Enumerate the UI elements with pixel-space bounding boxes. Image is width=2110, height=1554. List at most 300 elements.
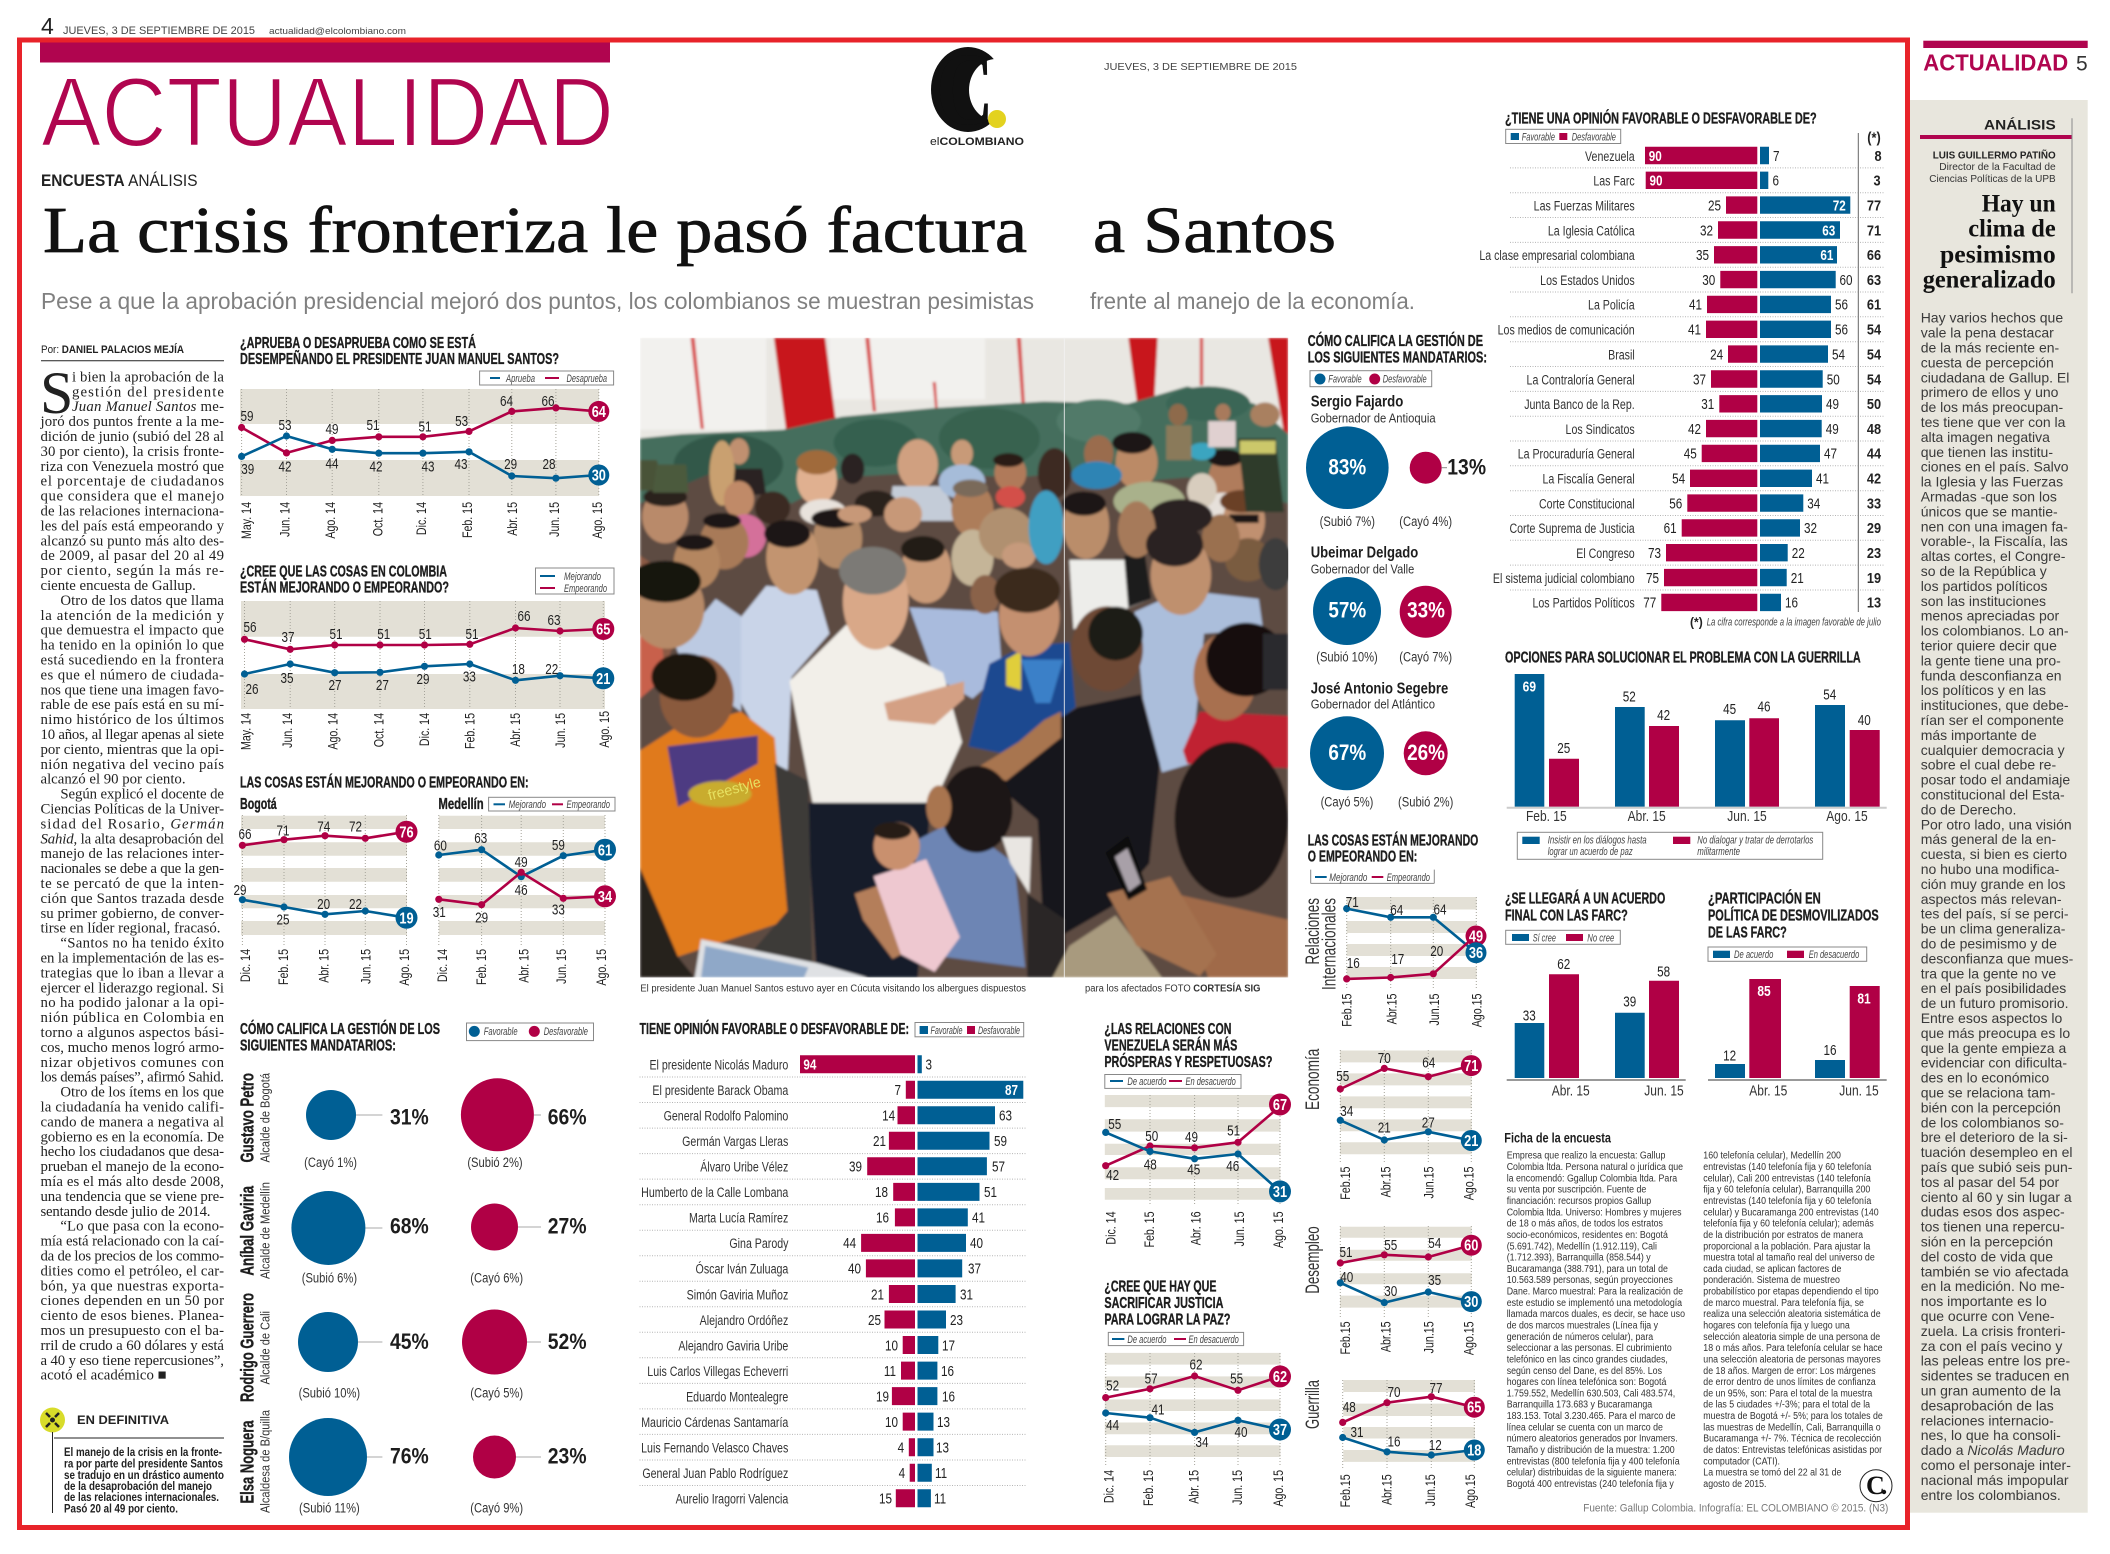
value labels: 16 xyxy=(941,1363,954,1379)
chart title: ¿PARTICIPACIÓN EN xyxy=(1708,888,1821,907)
x axis: Oct. 14 xyxy=(371,713,387,747)
man in blue vest xyxy=(968,642,1076,755)
value labels: 56 xyxy=(243,619,257,635)
chart: Bogotá: 71 xyxy=(276,822,290,839)
column chart: participación en política xyxy=(1708,888,1887,1099)
bar chart: personajes xyxy=(640,1019,1026,1507)
row names: El presidente Nicolás Maduro xyxy=(649,1057,788,1073)
value labels: 42 xyxy=(1106,1167,1119,1183)
July favourable column: 42 xyxy=(1867,470,1881,487)
sheet column 1: número aleatorios generados por Invamers. xyxy=(1507,1433,1678,1445)
legend xyxy=(1708,947,1867,961)
value labels: 30 xyxy=(1702,272,1715,288)
sidebar body text: los políticos y en las xyxy=(1921,682,2046,698)
value labels: 41 xyxy=(1688,321,1701,338)
icon: small logo seal: C xyxy=(1866,1471,1885,1500)
value labels: 66 xyxy=(517,608,531,624)
Sergio Fajardo: Gobernador de Antioquia xyxy=(1311,411,1436,426)
chart: relaciones internacionales: Feb.15 xyxy=(1339,994,1355,1027)
article body text: una tendencia que se viene pre- xyxy=(40,1189,224,1205)
chart: relaciones internacionales: Ago.15 xyxy=(1469,994,1485,1027)
value labels: 25 xyxy=(868,1311,881,1328)
legend: De acuerdo xyxy=(1127,1334,1166,1346)
sidebar body text: aspectos más relevan- xyxy=(1921,891,2062,907)
legend: Mejorando xyxy=(509,799,546,811)
chart title xyxy=(240,1019,440,1054)
article body text: te se percató de que la inten- xyxy=(40,876,224,892)
footnote: La cifra corresponde a la imagen favorable de julio xyxy=(1707,617,1881,629)
source line: Fuente: Gallup Colombia. Infografía: EL COLOMBIANO © 2015. (N3) xyxy=(1583,1503,1888,1515)
value labels: 44 xyxy=(843,1235,857,1252)
value labels: 49 xyxy=(325,421,339,437)
sheet column 2: de datos: Entrevistas telefónicas asistidas por xyxy=(1703,1444,1883,1456)
sidebar body text: la Iglesia y las Fuerzas xyxy=(1921,474,2063,490)
value labels: 24 xyxy=(1710,346,1724,363)
sidebar body text: en la medición. No me- xyxy=(1921,1278,2065,1294)
chart: Bogotá: Ago. 15 xyxy=(397,949,412,986)
July favourable column: 50 xyxy=(1867,395,1881,412)
x axis: Ago. 15 xyxy=(590,502,605,539)
row: Gustavo Petro: Gustavo Petro xyxy=(238,1073,258,1162)
chart title: ¿APRUEBA O DESAPRUEBA COMO SE ESTÁ xyxy=(240,333,476,352)
legend: Desfavorable xyxy=(1572,132,1616,144)
row names: Los Sindicatos xyxy=(1566,422,1635,437)
sidebar body text: Hay varios hechos que xyxy=(1921,310,2063,326)
value labels: 55 xyxy=(1108,1116,1121,1132)
chart: Medellín: 29 xyxy=(475,909,488,926)
chart: guerrilla: Feb.15 xyxy=(1338,1474,1353,1507)
chart title: LAS COSAS ESTÁN MEJORANDO O EMPEORANDO EN: xyxy=(240,773,529,792)
row: Elsa Noguera: 76% xyxy=(390,1444,429,1469)
chart: Bogotá: 76 xyxy=(399,824,414,842)
sidebar body text: no hubo una modifica- xyxy=(1921,861,2060,877)
article body text: sentando desde julio de 2014. xyxy=(40,1204,210,1220)
chart: economía: Abr.15 xyxy=(1378,1167,1394,1197)
x axis: Feb. 15 xyxy=(460,502,475,538)
chart title: ¿CREE QUE LAS COSAS EN COLOMBIA xyxy=(240,564,447,581)
value labels: 57 xyxy=(1145,1370,1158,1387)
chart: desempleo: 55 xyxy=(1384,1237,1397,1253)
value labels: 90 xyxy=(1649,172,1663,189)
value labels: 31 xyxy=(1273,1184,1287,1201)
row names: Los Partidos Políticos xyxy=(1532,595,1635,611)
legend xyxy=(1506,930,1620,944)
sheet column 1: telefónico en las cinco grandes ciudades, xyxy=(1507,1354,1668,1366)
chart: economía: 27 xyxy=(1422,1114,1435,1131)
city heading: Bogotá: Bogotá xyxy=(240,796,277,813)
Ubeimar Delgado: (Cayó 7%) xyxy=(1399,650,1452,665)
sheet column 2: agosto de 2015. xyxy=(1703,1478,1767,1490)
legend: En desacuerdo xyxy=(1809,949,1859,961)
row names: Las Fuerzas Militares xyxy=(1534,198,1635,214)
sidebar body text: dudas esos dos aspec- xyxy=(1921,1204,2065,1220)
value labels: 4 xyxy=(899,1465,906,1481)
sidebar body text: de un futuro promisorio. xyxy=(1921,995,2069,1011)
chart title: LAS COSAS ESTÁN MEJORANDO xyxy=(1308,830,1478,849)
chart: guerrilla: 65 xyxy=(1467,1399,1481,1417)
x axis: Jun. 15 xyxy=(1232,1211,1247,1246)
value labels: 11 xyxy=(884,1363,896,1379)
sidebar body text: desaprobación de las xyxy=(1921,1397,2054,1413)
chart: Bogotá: 72 xyxy=(349,818,362,835)
column chart: participación en política: 12 xyxy=(1723,1047,1736,1064)
value labels: 6 xyxy=(1772,172,1779,189)
chart title: ESTÁN MEJORANDO O EMPEORANDO? xyxy=(240,577,449,596)
sheet column 1: Barranquilla 173.683 y Bucaramanga xyxy=(1507,1399,1653,1411)
chart: Bogotá: 25 xyxy=(276,911,290,928)
sidebar body text: tes tiene que ver con la xyxy=(1921,414,2066,430)
chart: Bogotá: 29 xyxy=(233,882,247,898)
legend: Empeorando xyxy=(1387,872,1430,884)
article body text: dities como el petróleo, el car- xyxy=(40,1263,224,1279)
sheet column 1: 183.153. Total 3.230.465. Para el marco de xyxy=(1507,1410,1676,1422)
sheet column 1: Dane. Marco muestral: Para la realización de xyxy=(1507,1286,1683,1298)
photo: Santos among the crowd xyxy=(640,338,1288,978)
article body text: rable de ese país está en su mí- xyxy=(40,697,224,713)
sheet column 2: muestra total al tamaño real del universo de xyxy=(1703,1252,1875,1264)
chart: economía: 21 xyxy=(1378,1119,1391,1136)
chart: Medellín xyxy=(433,815,616,986)
José Antonio Segebre: (Subió 2%) xyxy=(1398,795,1453,810)
sheet column 1 xyxy=(1507,1150,1685,1490)
callout: en definitiva: se tradujo en un drástico aumento xyxy=(64,1470,224,1482)
value labels: 51 xyxy=(984,1184,997,1201)
icon: yellow badge xyxy=(40,1408,65,1432)
chart: economía: 55 xyxy=(1336,1068,1349,1084)
value labels: 41 xyxy=(1689,296,1702,313)
sidebar body text: son las instituciones xyxy=(1921,593,2046,609)
article body text: gestión del presidente xyxy=(72,384,224,400)
chart: economía: Jun.15 xyxy=(1421,1167,1437,1199)
value labels: 69 xyxy=(1523,678,1536,695)
July favourable column: 48 xyxy=(1867,420,1881,437)
row names: La Fiscalía General xyxy=(1543,471,1635,487)
x axis: Jun. 15 xyxy=(1230,1470,1245,1505)
value labels: 17 xyxy=(942,1337,955,1354)
sidebar author: LUIS GUILLERMO PATIÑO xyxy=(1933,149,2056,162)
legend: Favorable xyxy=(930,1025,962,1037)
sidebar body text: cualquier democracia y xyxy=(1921,742,2065,758)
article body text: i bien la aprobación de la xyxy=(72,369,224,385)
article body text: ción que Santos trazada desde xyxy=(40,891,224,907)
value labels: 53 xyxy=(455,413,468,429)
chart title: POLÍTICA DE DESMOVILIZADOS xyxy=(1708,905,1879,924)
value labels: 64 xyxy=(592,404,606,421)
unfavourable bars xyxy=(800,1055,915,1507)
value labels: 30 xyxy=(592,467,606,485)
article body text: prueban el manejo de la econo- xyxy=(40,1159,224,1175)
x axis: Dic. 14 xyxy=(414,502,429,535)
value labels: 13 xyxy=(936,1439,949,1456)
value labels: 27 xyxy=(376,677,389,693)
drop cap: S xyxy=(40,360,73,426)
man in black t-shirt xyxy=(1002,694,1160,934)
row names: Gina Parody xyxy=(729,1236,789,1252)
column chart: acuerdo final con las Farc xyxy=(1505,888,1686,1099)
sheet column 1: Empresa que realizo la encuesta: Gallup xyxy=(1507,1150,1665,1162)
article body text: Otro de los datos que llama xyxy=(60,593,224,609)
article body text: ciente encuesta de Gallup. xyxy=(40,578,196,594)
article body text: la ciudadanía ha venido califi- xyxy=(40,1100,224,1116)
chart: guerrilla xyxy=(1303,1380,1485,1508)
Sergio Fajardo: 83% xyxy=(1328,455,1366,480)
sidebar body text: tos al pasar del 54 por xyxy=(1921,1174,2060,1190)
x axis: Abr. 15 xyxy=(505,502,520,536)
value labels: 33 xyxy=(463,668,476,685)
article body text: tirse en líder regional, fracasó. xyxy=(40,921,220,937)
sheet column 2: hogares con telefonía fija y luego una xyxy=(1703,1320,1850,1332)
article body text: que demuestra el impacto que xyxy=(40,623,224,639)
row: Aníbal Gaviria: (Cayó 6%) xyxy=(470,1271,523,1286)
sheet column 2: La muestra se tomó del 22 al 31 de xyxy=(1703,1467,1841,1479)
column chart: acuerdo final con las Farc: Abr. 15 xyxy=(1552,1082,1590,1099)
row: Rodrigo Guerrero: (Subió 10%) xyxy=(299,1385,360,1401)
callout: en definitiva: El manejo de la crisis en la fronte- xyxy=(64,1447,222,1459)
chart title: CÓMO CALIFICA LA GESTIÓN DE xyxy=(1308,331,1483,350)
value labels: 47 xyxy=(1824,445,1837,462)
sidebar body text: sión en la percepción xyxy=(1921,1234,2053,1250)
legend xyxy=(480,371,614,385)
value labels: 21 xyxy=(871,1286,884,1303)
chart: desempleo: 40 xyxy=(1340,1269,1353,1285)
x axis xyxy=(238,711,612,750)
small-multiple line charts: temas xyxy=(1303,830,1486,1508)
legend: En desacuerdo xyxy=(1186,1076,1236,1088)
sheet column 1: Bogotá 400 entrevistas (240 telefonía fija y xyxy=(1507,1478,1674,1490)
column chart: participación en política: 85 xyxy=(1757,983,1771,999)
value labels: 77 xyxy=(1643,594,1656,611)
legend: Favorable xyxy=(1522,132,1555,144)
x axis: Dic. 14 xyxy=(1103,1211,1119,1245)
line chart: justicia y paz xyxy=(1101,1278,1291,1507)
bottom right man xyxy=(1052,915,1162,977)
sheet column 1: financiación: recursos propios Gallup xyxy=(1507,1195,1651,1207)
article body text: por ciento, según la más re- xyxy=(40,563,224,579)
chart: economía: 21 xyxy=(1464,1133,1478,1150)
legend: No dialogar y tratar de derrotarlos xyxy=(1697,834,1814,846)
headline xyxy=(43,194,1336,267)
column chart: participación en política: Abr. 15 xyxy=(1749,1082,1787,1099)
sidebar body text: rían ser el componente xyxy=(1921,712,2064,728)
value labels: 40 xyxy=(970,1235,983,1252)
article body text: ciento de esos bienes. Planea- xyxy=(40,1308,224,1324)
value labels: 51 xyxy=(1227,1122,1240,1139)
legend: Mejorando xyxy=(1329,872,1367,884)
x axis xyxy=(1526,808,1868,824)
value labels: 19 xyxy=(876,1388,889,1405)
value labels: 23 xyxy=(950,1311,963,1328)
sidebar body text: posar todo el andamiaje xyxy=(1921,772,2070,788)
row names: Alejandro Ordóñez xyxy=(700,1312,788,1328)
article body text: hecho los ciudadanos que desa- xyxy=(40,1144,224,1160)
row names: La Procuraduría General xyxy=(1518,446,1635,462)
sidebar body text: más importante de xyxy=(1921,727,2037,743)
x axis: Ago. 15 xyxy=(1271,1470,1286,1507)
line chart: relaciones con Venezuela xyxy=(1103,1021,1291,1248)
Sergio Fajardo: (Subió 7%) xyxy=(1320,514,1375,529)
chart: desempleo: 30 xyxy=(1464,1294,1478,1311)
column chart: acuerdo final con las Farc: 62 xyxy=(1557,955,1570,972)
July favourable column: (*) xyxy=(1867,129,1881,146)
sheet column 1: de dos marcos muestrales (Línea fija y xyxy=(1507,1320,1658,1332)
sheet column 2: de marco muestral. Para telefonía fija, se xyxy=(1703,1297,1864,1309)
sheet column 2: celular) y Bucaramanga 200 entrevistas (140 xyxy=(1703,1207,1879,1219)
chart title xyxy=(1308,830,1478,865)
legend xyxy=(1517,832,1823,859)
legend: Desfavorable xyxy=(1383,374,1427,386)
July favourable column: 77 xyxy=(1867,196,1881,214)
x axis: May. 14 xyxy=(239,502,254,539)
sidebar body text: za con el país vecino y xyxy=(1921,1338,2062,1354)
row names: General Juan Pablo Rodríguez xyxy=(642,1466,788,1481)
value labels: 54 xyxy=(1832,346,1845,363)
page header left: 4 xyxy=(41,13,54,39)
value labels: 51 xyxy=(329,626,343,642)
chart: relaciones internacionales: 20 xyxy=(1430,943,1443,959)
chart: guerrilla: Guerrilla xyxy=(1303,1380,1324,1429)
chart title: SACRIFICAR JUSTICIA xyxy=(1104,1295,1224,1312)
laptop xyxy=(695,939,867,977)
article body text: mos un presupuesto con el ba- xyxy=(40,1323,224,1339)
chart: relaciones internacionales: 36 xyxy=(1469,945,1483,963)
value labels: 44 xyxy=(1106,1417,1120,1433)
value labels: 43 xyxy=(454,456,468,472)
sheet column 2: de 18 años. Margen de error: Los márgenes xyxy=(1703,1365,1876,1377)
value labels: 35 xyxy=(1696,247,1709,263)
sheet column 2: celular), Cali 200 entrevistas (140 telefonía xyxy=(1703,1173,1871,1185)
value labels: 94 xyxy=(803,1056,817,1073)
value labels: 16 xyxy=(942,1388,955,1405)
chart: Bogotá: Abr. 15 xyxy=(316,949,332,983)
row names: Alejandro Gaviria Uribe xyxy=(678,1338,788,1354)
value labels: 34 xyxy=(1807,495,1821,512)
chart: desempleo: Jun.15 xyxy=(1421,1321,1437,1353)
July favourable column: 23 xyxy=(1867,544,1881,561)
headline: a Santos xyxy=(1093,194,1336,267)
value labels: 87 xyxy=(1005,1082,1018,1098)
chart: relaciones internacionales: Abr.15 xyxy=(1384,994,1400,1024)
x axis: Jun. 15 xyxy=(547,502,562,537)
row names: Los Estados Unidos xyxy=(1540,273,1635,288)
chart: economía: Ago.15 xyxy=(1461,1167,1477,1200)
sheet column 1: según censo del Dane, es del 85%. Los xyxy=(1507,1365,1662,1377)
x axis: Feb. 15 xyxy=(1526,808,1567,824)
subheadline: Pese a que la aprobación presidencial mejoró dos puntos, los colombianos se muestran pesimistas xyxy=(41,288,1034,314)
row: Gustavo Petro: (Cayó 1%) xyxy=(304,1155,357,1170)
sheet column 1: (5.691.742), Medellín (1.912.119), Cali xyxy=(1507,1241,1657,1253)
sheet column 2: ponderación. Sistema de muestreo xyxy=(1703,1275,1840,1286)
article body text: trategias que lo iban a llevar a xyxy=(40,965,224,981)
chart: Medellín: Ago. 15 xyxy=(594,949,610,986)
value labels: 44 xyxy=(326,455,339,472)
chart title: ¿TIENE UNA OPINIÓN FAVORABLE O DESFAVORABLE DE? xyxy=(1505,108,1817,128)
x axis: Ago. 14 xyxy=(325,713,341,750)
value labels: 14 xyxy=(882,1107,896,1124)
row names: Marta Lucía Ramírez xyxy=(689,1210,788,1226)
article body text: nión pública en Colombia en xyxy=(40,1010,225,1026)
value labels xyxy=(1523,678,1871,756)
sheet column 1: generación de números celular), para xyxy=(1507,1331,1654,1343)
José Antonio Segebre: (Cayó 5%) xyxy=(1321,795,1373,810)
value labels: 11 xyxy=(934,1490,946,1507)
chart: relaciones internacionales: 71 xyxy=(1346,894,1359,910)
value labels: 35 xyxy=(280,670,294,686)
José Antonio Segebre: 67% xyxy=(1328,741,1366,765)
row: Rodrigo Guerrero: Rodrigo Guerrero xyxy=(238,1293,258,1402)
July favourable column: 71 xyxy=(1867,221,1881,239)
chart: Bogotá xyxy=(233,815,418,986)
sidebar author: Ciencias Políticas de la UPB xyxy=(1929,174,2056,185)
sidebar body text: alta imagen negativa xyxy=(1921,429,2050,445)
x axis: Ago. 15 xyxy=(1826,808,1868,824)
legend: lograr un acuerdo de paz xyxy=(1548,846,1633,858)
value labels: 45 xyxy=(1723,701,1736,717)
row: Rodrigo Guerrero: 52% xyxy=(548,1330,587,1354)
sheet column 1: socio-económicos, residentes en: Bogotá xyxy=(1507,1229,1668,1241)
article body text: Según explicó el docente de xyxy=(60,787,224,803)
baby and father xyxy=(914,820,1025,968)
unfavourable bars xyxy=(1645,147,1757,611)
sidebar body text: be un clima generaliza- xyxy=(1921,921,2066,937)
Ubeimar Delgado xyxy=(1311,545,1452,665)
legend: Insistir en los diálogos hasta xyxy=(1548,834,1647,846)
sidebar body text: que la gente empieza a xyxy=(1921,1040,2066,1056)
legend: De acuerdo xyxy=(1127,1076,1166,1088)
x axis: Ago. 15 xyxy=(1271,1211,1286,1248)
sheet column 2 xyxy=(1703,1150,1883,1490)
value labels xyxy=(243,608,614,697)
sidebar author: Director de la Facultad de xyxy=(1939,162,2056,173)
chart: Bogotá: 19 xyxy=(399,910,414,928)
chart title: CÓMO CALIFICA LA GESTIÓN DE LOS xyxy=(240,1019,440,1038)
legend xyxy=(1310,371,1432,387)
Ubeimar Delgado: Ubeimar Delgado xyxy=(1311,545,1418,562)
article body text: mía está relacionado con la caí- xyxy=(40,1234,224,1250)
chart: economía: 70 xyxy=(1378,1050,1391,1066)
legend: Empeorando xyxy=(564,583,607,595)
row names xyxy=(1479,148,1635,611)
article body text: nos que tiene una imagen favo- xyxy=(40,682,224,698)
article body text xyxy=(40,369,225,1384)
sidebar body text: nos importante es lo xyxy=(1921,1293,2047,1309)
value labels: 49 xyxy=(1826,396,1839,412)
July favourable column: 19 xyxy=(1867,569,1881,586)
chart: guerrilla: 12 xyxy=(1429,1437,1442,1453)
article body text: de las relaciones internaciona- xyxy=(40,504,224,520)
July favourable column: 44 xyxy=(1867,445,1881,462)
column chart: participación en política: Jun. 15 xyxy=(1839,1082,1879,1099)
row names: Mauricio Cárdenas Santamaría xyxy=(641,1415,788,1430)
July favourable column: 63 xyxy=(1867,271,1881,288)
chart: relaciones internacionales: Internacionales xyxy=(1320,898,1340,990)
logo: El Colombiano: elCOLOMBIANO xyxy=(930,136,1024,148)
chart: Medellín: 33 xyxy=(552,901,565,918)
chart: Medellín: 46 xyxy=(515,882,528,898)
chart: desempleo: Desempleo xyxy=(1303,1226,1324,1294)
sidebar body text: bre el deterioro de la si- xyxy=(1921,1129,2068,1145)
article body text: gobierno es en la economía. De xyxy=(40,1129,224,1145)
chart: Bogotá: 20 xyxy=(317,896,330,912)
July favourable column: 54 xyxy=(1867,370,1881,388)
sidebar body text: tos tienen una repercu- xyxy=(1921,1219,2065,1235)
article body text: torno a algunos aspectos bási- xyxy=(40,1025,224,1041)
José Antonio Segebre: 26% xyxy=(1407,741,1445,765)
x axis: Abr. 15 xyxy=(508,713,523,747)
value labels: 29 xyxy=(504,456,517,472)
chart: guerrilla: 16 xyxy=(1387,1433,1401,1450)
sheet column 1: 1.759.552, Medellín 630.503, Cali 483.574, xyxy=(1507,1388,1675,1400)
row names: Óscar Iván Zuluaga xyxy=(696,1260,788,1277)
